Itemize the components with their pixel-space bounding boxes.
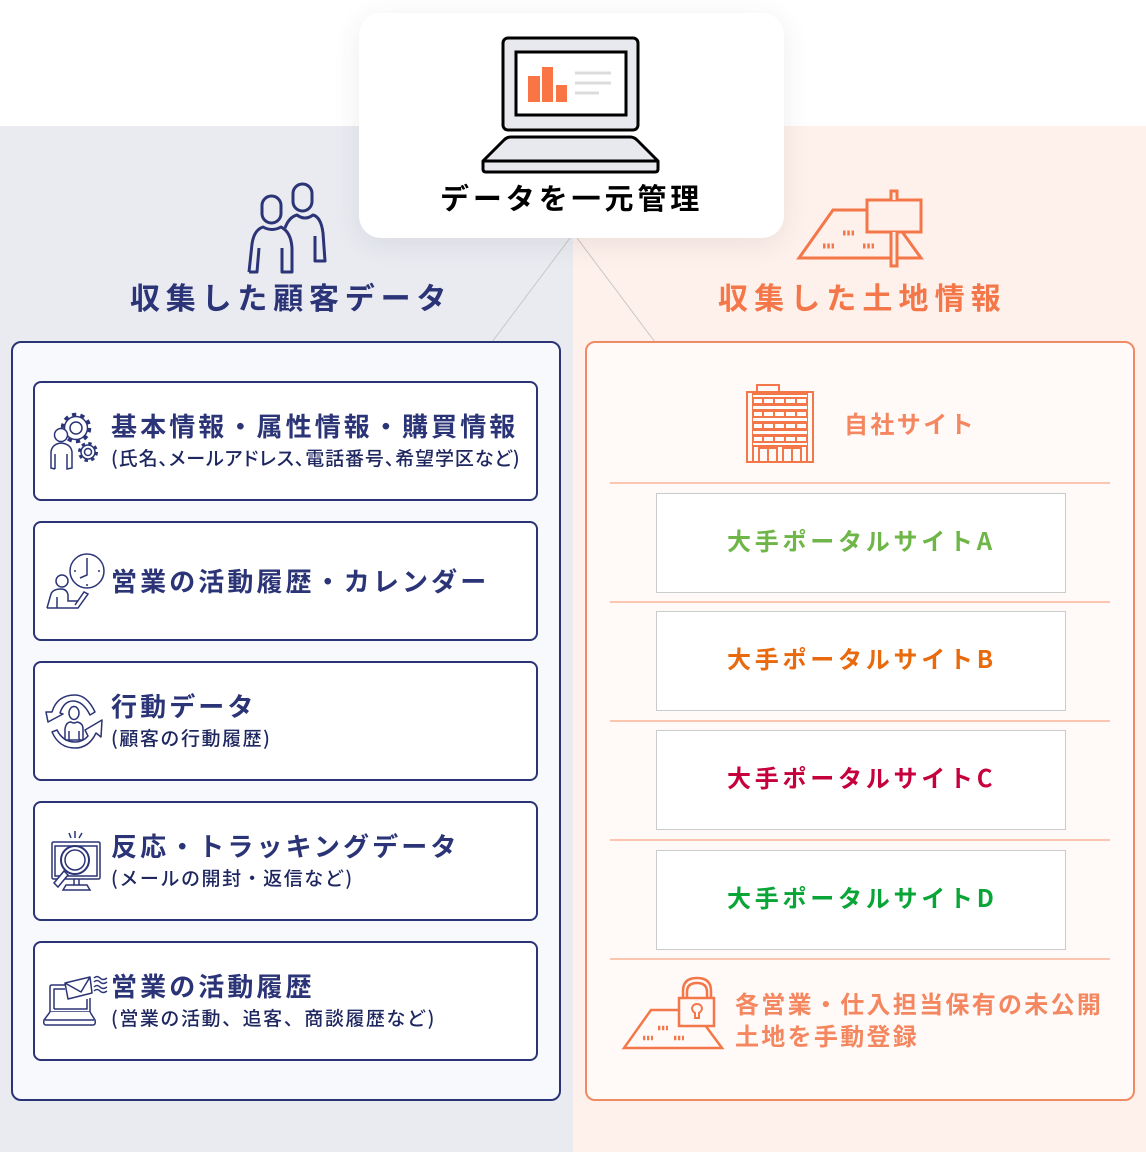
card: sales activity history	[33, 941, 538, 1061]
icon: land with padlock	[622, 976, 724, 1050]
card subtext: (氏名、メールアドレス、電話番号、希望学区など)	[111, 444, 521, 471]
heading: collected customer data: 収集した顧客データ	[130, 274, 452, 318]
divider	[610, 958, 1110, 960]
icon: laptop with chart	[482, 36, 660, 174]
heading: collected land information: 収集した土地情報	[718, 274, 1007, 318]
card: sales activity history calendar	[33, 521, 538, 641]
label: portal A: 大手ポータルサイトA	[727, 522, 996, 557]
portal box C	[656, 730, 1066, 830]
card subtext: (メールの開封・返信など)	[111, 864, 354, 891]
label: portal C: 大手ポータルサイトC	[727, 759, 996, 794]
portal box B	[656, 611, 1066, 711]
divider	[610, 839, 1110, 841]
icon: monitor with magnifier	[51, 831, 101, 891]
card: behavior data	[33, 661, 538, 781]
portal box D	[656, 850, 1066, 950]
icon: land with signboard	[796, 190, 924, 268]
card heading: 行動データ	[111, 687, 257, 724]
panel: land information	[585, 341, 1135, 1101]
divider	[610, 482, 1110, 484]
card heading: 基本情報・属性情報・購買情報	[111, 407, 518, 444]
card: reaction tracking	[33, 801, 538, 921]
icon: office building	[746, 384, 814, 463]
label: own site: 自社サイト	[844, 405, 976, 440]
card subtext: (顧客の行動履歴)	[111, 724, 271, 751]
portal box A	[656, 493, 1066, 593]
icon: person with clock	[46, 553, 105, 609]
right background panel	[573, 126, 1146, 1152]
label: portal B: 大手ポータルサイトB	[727, 640, 997, 675]
card subtext: (営業の活動、追客、商談履歴など)	[111, 1004, 436, 1031]
card heading: 営業の活動履歴	[111, 967, 315, 1004]
central card: data management	[359, 13, 784, 238]
label: portal D: 大手ポータルサイトD	[727, 879, 998, 914]
card heading: 反応・トラッキングデータ	[111, 827, 459, 864]
card: basic info	[33, 381, 538, 501]
label: unpublished land registration: 土地を手動登録	[735, 1017, 919, 1052]
left background panel	[0, 126, 573, 1152]
icon: person with gears	[50, 412, 98, 470]
divider	[610, 601, 1110, 603]
card heading: 営業の活動履歴・カレンダー	[111, 562, 489, 599]
heading: central: データを一元管理	[440, 176, 703, 218]
divider	[610, 720, 1110, 722]
label: unpublished land registration	[735, 985, 1103, 1052]
icon: people	[248, 182, 326, 274]
panel: customer data	[11, 341, 561, 1101]
icon: laptop with mail	[43, 976, 108, 1026]
icon: person in cycle	[45, 694, 103, 749]
label: unpublished land registration: 各営業・仕入担当保有の未公開	[735, 985, 1103, 1020]
